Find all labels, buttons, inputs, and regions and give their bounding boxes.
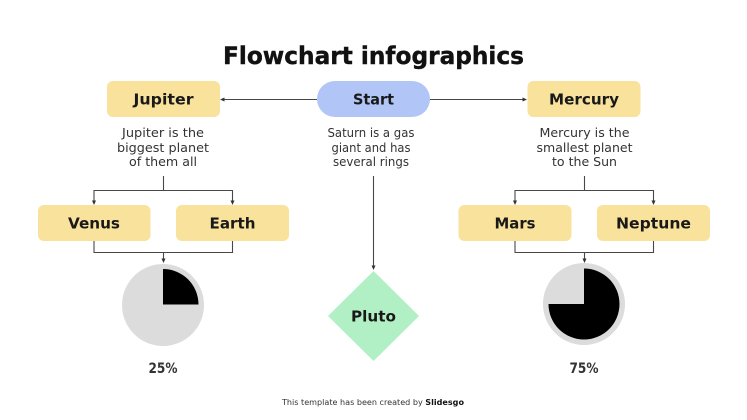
arrow: start to pluto (372, 176, 376, 270)
node: neptune: Neptune (616, 214, 691, 232)
text: jupiter description: Jupiter is the (121, 125, 204, 140)
label: 25%: 25% (148, 361, 178, 377)
node: venus (38, 205, 150, 241)
text: mercury description: Mercury is the (540, 125, 630, 140)
text: mercury description (536, 125, 633, 169)
text: mercury description: to the Sun (552, 154, 617, 169)
node: start: Start (353, 90, 395, 108)
arrow: start to mercury (430, 98, 527, 102)
title: Flowchart infographics (223, 42, 524, 70)
arrow: start to jupiter (220, 98, 317, 102)
node: jupiter (107, 81, 220, 117)
node: earth (176, 205, 289, 241)
text: saturn description: several rings (333, 154, 409, 169)
arrow: mars and neptune merge (515, 241, 654, 263)
node: venus: Venus (68, 214, 120, 232)
node: mars: Mars (494, 214, 536, 232)
footer credit: This template has been created by Slidesgo (281, 398, 465, 407)
node: jupiter: Jupiter (132, 90, 194, 108)
pie chart: 25% (122, 264, 204, 346)
text: saturn description: Saturn is a gas (328, 125, 414, 140)
text: jupiter description (117, 125, 209, 169)
node: start (317, 81, 430, 117)
node: pluto (328, 271, 419, 361)
text: jupiter description: biggest planet (117, 140, 209, 155)
label: 75%: 75% (570, 361, 598, 377)
pie chart: 75% (543, 263, 625, 345)
node: mercury: Mercury (549, 90, 619, 108)
text: jupiter description: of them all (129, 154, 197, 169)
node: earth: Earth (210, 214, 256, 232)
node: mercury (528, 81, 640, 117)
text: mercury description: smallest planet (536, 140, 633, 155)
node: mars (458, 205, 572, 241)
text: saturn description: giant and has (332, 140, 410, 155)
node: neptune (597, 205, 710, 241)
node: pluto: Pluto (351, 308, 396, 326)
arrow: mercury split (513, 176, 656, 205)
arrow: jupiter split (92, 176, 234, 205)
arrow: venus and earth merge (94, 241, 232, 263)
text: saturn description (328, 125, 414, 169)
